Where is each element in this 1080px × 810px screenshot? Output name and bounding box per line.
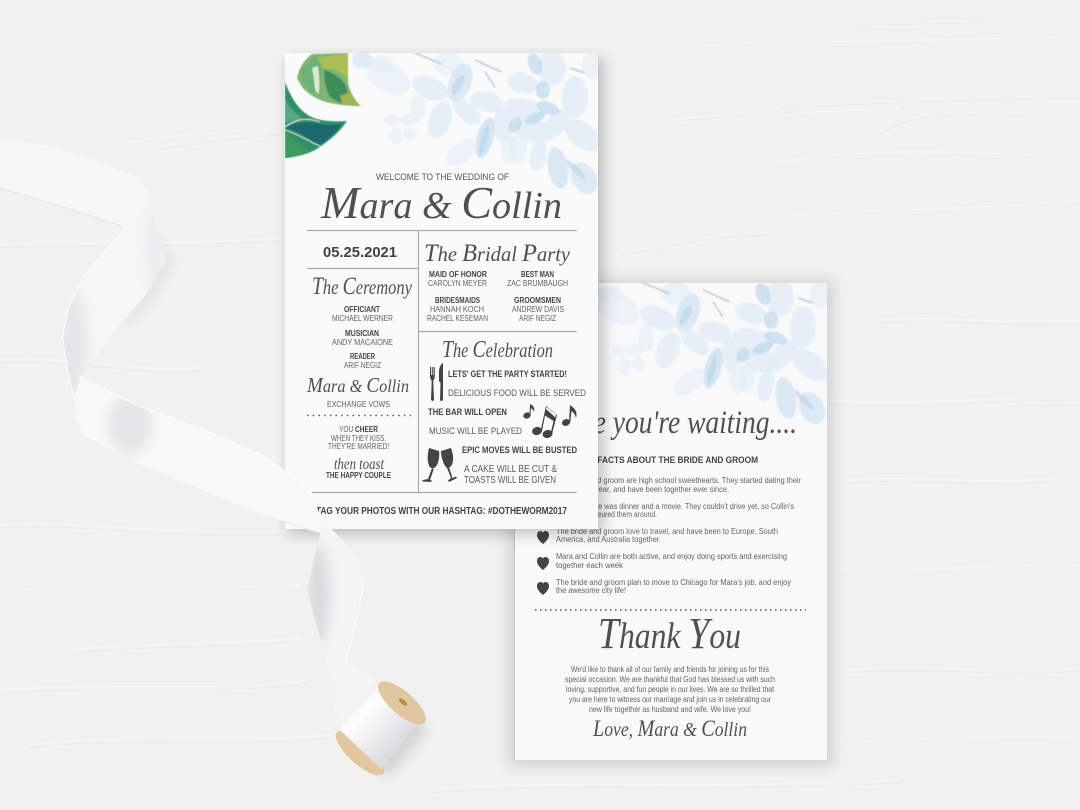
names list: ARIF NEGIZ: [519, 314, 556, 323]
heading: the celebration: The Celebration: [442, 337, 553, 363]
ceremony roles: OFFICIANT: [344, 305, 380, 314]
text block: fun facts list: Their first date was dinner and a movie. They couldn't drive yet, so Collin's: [556, 502, 794, 511]
text block: fun facts list: America, and Australia together.: [556, 535, 661, 544]
ceremony roles: MUSICIAN: [345, 329, 379, 338]
text block: fun facts list: The bride and groom love to travel, and have been to Europe, South: [556, 527, 778, 536]
text block: fun facts list: together each week: [556, 561, 624, 570]
ceremony roles: ARIF NEGIZ: [344, 361, 381, 370]
text block: fun facts list: sophomore year, and have been together ever since.: [556, 485, 729, 494]
text block: fun facts list: The bride and groom plan to move to Chicago for Mara's job, and enjoy: [556, 578, 791, 587]
text block: fun facts list: mother chauffeured them around.: [556, 510, 657, 519]
names list: MAID OF HONOR: [429, 270, 487, 279]
spool: center hole: [398, 697, 408, 707]
heading: the bridal party: The Bridal Party: [424, 240, 571, 267]
text: when they kiss: WHEN THEY KISS.: [331, 434, 386, 443]
celebration text lines: TOASTS WILL BE GIVEN: [464, 475, 556, 486]
ribbon with spool: [0, 137, 432, 782]
text block: fun facts list: [556, 476, 801, 595]
title: couple names: Mara & Collin: [320, 177, 562, 228]
footer: hashtag line: TAG YOUR PHOTOS WITH OUR HASHTAG: #DOTHEWORM2017: [316, 506, 567, 517]
names list: RACHEL KESEMAN: [427, 314, 488, 323]
heading: thank you: Thank You: [598, 609, 741, 658]
text: welcome line: WELCOME TO THE WEDDING OF: [376, 172, 509, 183]
names list: BEST MAN: [521, 270, 554, 279]
icon: music notes: [522, 404, 577, 439]
ribbon: top band: [0, 137, 145, 227]
text block: thank you message: [565, 665, 775, 714]
ceremony roles: READER: [350, 352, 375, 361]
script: then toast: then toast: [334, 456, 384, 473]
text block: thank you message: loving, supportive, and fun people in our lives. We are so thrilled that: [566, 685, 775, 694]
panel: bridal party: [424, 240, 571, 323]
ribbon: lower band: [307, 529, 365, 660]
leaf: upper: [297, 53, 361, 106]
icon: fork and knife: [430, 363, 443, 401]
celebration text lines: MUSIC WILL BE PLAYED: [429, 426, 522, 437]
panel: celebration: [422, 337, 586, 486]
text: you cheer: YOU CHEER: [339, 425, 378, 434]
ribbon: long diagonal band: [80, 377, 321, 534]
names list: ANDREW DAVIS: [512, 305, 564, 314]
ribbon: descending band: [62, 227, 166, 398]
celebration text lines: DELICIOUS FOOD WILL BE SERVED: [448, 388, 586, 399]
signature: love, mara and collin: Love, Mara & Collin: [592, 716, 747, 741]
text block: fun facts list: The bride and groom are high school sweethearts. They started dating their: [556, 476, 801, 485]
celebration text lines: THE BAR WILL OPEN: [428, 407, 507, 417]
text: the happy couple: THE HAPPY COUPLE: [326, 471, 392, 480]
celebration text lines: A CAKE WILL BE CUT &: [464, 464, 557, 475]
text block: thank you message: you are here to witness our marriage and join us in celebrating our: [569, 695, 771, 704]
panel: front card: [285, 50, 606, 529]
names list: GROOMSMEN: [514, 296, 561, 305]
panel: back card: [514, 280, 834, 760]
text block: thank you message: We'd like to thank all of our family and friends for joining us for this: [571, 665, 769, 674]
floral header: front card: [352, 50, 606, 199]
text block: thank you message: new life together as husband and wife. We love you!: [589, 705, 751, 714]
panel: ceremony: [306, 273, 415, 480]
celebration text lines: [428, 369, 586, 486]
text block: thank you message: special occasion. We are thankful that God has blessed us with such: [565, 675, 775, 684]
heading: the ceremony: The Ceremony: [312, 273, 413, 300]
icon: champagne glasses: [422, 448, 457, 482]
ceremony roles: MICHAEL WERNER: [332, 314, 393, 323]
ceremony roles: [332, 305, 393, 370]
text: they're married: THEY'RE MARRIED!: [328, 442, 389, 451]
celebration text lines: EPIC MOVES WILL BE BUSTED: [462, 445, 577, 455]
ceremony roles: ANDY MACAIONE: [332, 338, 393, 347]
text block: fun facts list: Mara and Collin are both active, and enjoy doing sports and exercising: [556, 552, 787, 561]
celebration text lines: LETS' GET THE PARTY STARTED!: [448, 369, 567, 379]
text block: fun facts list: the awesome city life!: [556, 586, 626, 595]
names list: CAROLYN MEYER: [428, 279, 487, 288]
names list: [427, 270, 568, 323]
spool: ribbon roll: [340, 688, 414, 769]
spool: top disc: [372, 675, 432, 731]
leaf: lower: [285, 82, 347, 158]
names list: BRIDESMAIDS: [435, 296, 481, 305]
heading: while you're waiting: While you're waiting....: [537, 397, 797, 442]
subheading: fun facts: FUN FACTS ABOUT THE BRIDE AND GROOM: [578, 455, 758, 466]
shadow: back card: [508, 280, 834, 766]
names list: HANNAH KOCH: [430, 305, 484, 314]
floral header: back card: [598, 283, 827, 424]
text: exchange vows: EXCHANGE VOWS: [327, 400, 390, 409]
script: mara and collin: Mara & Collin: [306, 373, 409, 397]
spool: bottom disc: [330, 724, 390, 782]
date: 05.25.2021: [323, 244, 397, 261]
shadow: front card: [288, 58, 604, 534]
grid lines: [307, 230, 577, 492]
illustration: green leaves: [285, 53, 361, 158]
icons: hearts: [537, 531, 549, 595]
names list: ZAC BRUMBAUGH: [507, 279, 568, 288]
